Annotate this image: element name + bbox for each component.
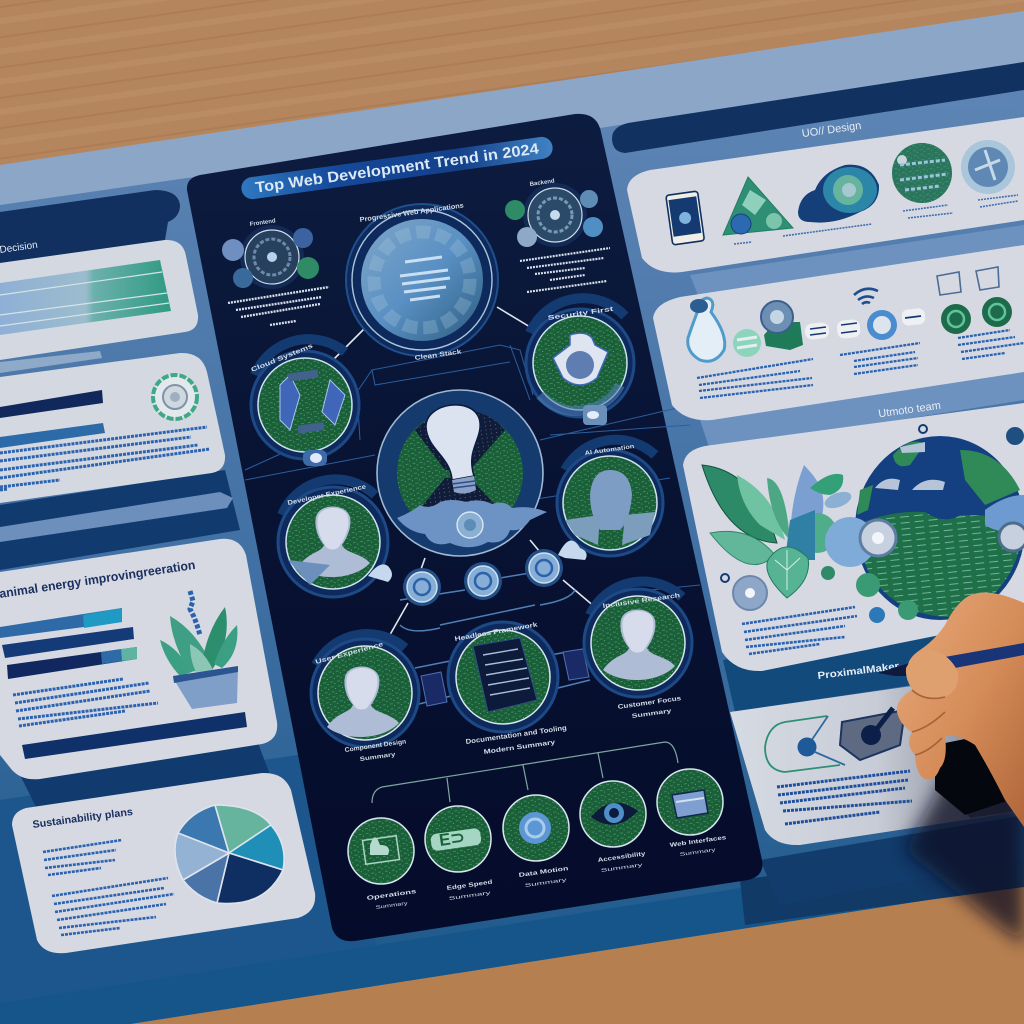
bars	[0, 608, 137, 679]
right panel: process diagram	[730, 670, 1024, 845]
small connector nodes	[403, 549, 563, 606]
icon: edge arrows	[425, 806, 493, 902]
portrait: right person: Inclusive Research	[602, 592, 681, 610]
light orb and rings	[721, 425, 1024, 623]
text block	[777, 771, 912, 824]
portrait: left person: User Experience	[315, 641, 385, 666]
icon: cloud	[798, 165, 879, 223]
text block	[742, 607, 857, 654]
icon: blue swirl: Data Motion	[518, 866, 569, 879]
portrait: right person: Summary	[631, 708, 673, 720]
portrait: center document: Headless Framework	[454, 621, 539, 643]
right header band: UO// Design	[801, 120, 862, 140]
cast shadow of hand	[905, 730, 1024, 945]
icon: bulb	[688, 298, 725, 361]
cloud base	[397, 500, 547, 547]
blue bar	[0, 423, 105, 448]
central bulb node	[377, 390, 547, 556]
lens caption: Progressive Web Applications	[359, 202, 464, 224]
icon: blue swirl: Summary	[524, 877, 568, 889]
navy bar	[0, 390, 103, 418]
icon: document squares	[937, 267, 999, 295]
thumb	[906, 650, 958, 698]
left panel: bars and badge	[0, 353, 225, 503]
icon: edge arrows: Edge Speed	[446, 880, 493, 892]
node caption: Backend	[529, 179, 555, 188]
icon: cloud window: Summary	[375, 900, 409, 911]
portrait: right person: Customer Focus	[617, 695, 682, 711]
left header band: Decision	[0, 240, 38, 256]
icon: triangle	[723, 177, 793, 235]
green node: lower-right profile: AI Automation	[584, 444, 635, 457]
small progress bar	[0, 351, 102, 373]
icon: phone	[666, 191, 704, 245]
green node: right shield: Security First	[547, 306, 615, 322]
left panel: sustainability pie	[12, 773, 315, 953]
title banner	[240, 136, 554, 200]
text block	[0, 427, 210, 490]
icon: lens tower	[761, 301, 803, 350]
portrait: left person	[311, 634, 419, 763]
text block	[13, 679, 158, 726]
icon: green rings	[941, 297, 1012, 334]
green node: left profile	[278, 479, 392, 597]
icon: eye: Summary	[600, 862, 644, 874]
left arrow band	[0, 492, 233, 542]
icon: green disc	[733, 329, 761, 357]
icon: browser window: Summary	[679, 847, 717, 858]
mini grid blocks between portraits	[421, 649, 589, 706]
icon: potted plant	[160, 591, 238, 709]
portrait: center document	[448, 621, 567, 756]
bottom icon row	[348, 769, 728, 911]
icon: browser window: Web Interfaces	[669, 835, 728, 849]
plant leaves	[702, 465, 854, 598]
heading: process: ProximalMaker	[817, 661, 900, 682]
network lines and wireframe	[245, 307, 700, 803]
icon: wire globe	[892, 143, 952, 203]
icon: blue ring	[867, 310, 897, 340]
pie chart	[175, 805, 284, 904]
icon: eye: Accessibility	[597, 851, 647, 864]
green node: lower-right profile	[557, 440, 663, 560]
heading: mid right: Utmoto team	[878, 400, 942, 420]
text blocks	[43, 840, 122, 875]
icon: cloud window	[348, 818, 418, 911]
left header band	[0, 190, 180, 263]
hand holding pen	[878, 592, 1024, 827]
heading: animal energy improvingreeration	[0, 558, 196, 601]
green node: left chip: Cloud Systems	[250, 342, 314, 374]
icon: light bulb	[426, 405, 480, 494]
wood lower strip	[130, 885, 1024, 1024]
icon: edge arrows: E⊃	[438, 828, 466, 850]
icon: gear badge	[153, 375, 197, 419]
green node: left chip	[250, 339, 359, 466]
right panel: connected icons	[653, 245, 1024, 420]
green gradient chart	[0, 260, 171, 335]
icon: data orb	[961, 140, 1015, 194]
central lens: Clean Stack	[414, 348, 462, 362]
left panel: stacked bars	[0, 240, 198, 373]
icon: pills	[804, 308, 926, 340]
portrait: center document: Documentation and Tooling	[465, 725, 567, 746]
right header band	[612, 62, 1024, 153]
central lens	[346, 202, 498, 362]
process path	[765, 708, 905, 772]
portrait: center document: Modern Summary	[483, 739, 556, 756]
portrait: left person: Summary	[359, 752, 397, 763]
icon: browser window	[657, 769, 728, 858]
icon: eye	[580, 781, 647, 874]
captions	[734, 195, 1018, 244]
top-right orbit node	[505, 179, 610, 292]
green node: left profile: Developer Experience	[287, 483, 367, 507]
portrait: left person: Component Design	[344, 738, 407, 754]
globe	[855, 436, 1024, 620]
heading: Sustainability plans	[32, 806, 134, 831]
top-left orbit node	[222, 218, 329, 325]
icon: wifi	[854, 289, 878, 304]
portrait: right person	[584, 582, 692, 720]
icon: cloud window: Operations	[366, 889, 418, 902]
central dark panel	[187, 114, 762, 941]
icon: edge arrows: Summary	[448, 890, 492, 902]
icon: blue swirl	[503, 795, 569, 889]
text blocks	[697, 330, 1024, 398]
node caption: Frontend	[249, 218, 276, 228]
left panel: plant report	[0, 539, 277, 779]
long navy bar	[22, 712, 247, 759]
green node: right shield	[526, 298, 634, 425]
shaded area	[930, 745, 1024, 818]
pen	[878, 643, 1024, 676]
right panel: UX icons	[627, 117, 1024, 272]
right panel: sustainability globe	[683, 403, 1024, 671]
title banner: Top Web Development Trend in 2024	[254, 140, 541, 197]
